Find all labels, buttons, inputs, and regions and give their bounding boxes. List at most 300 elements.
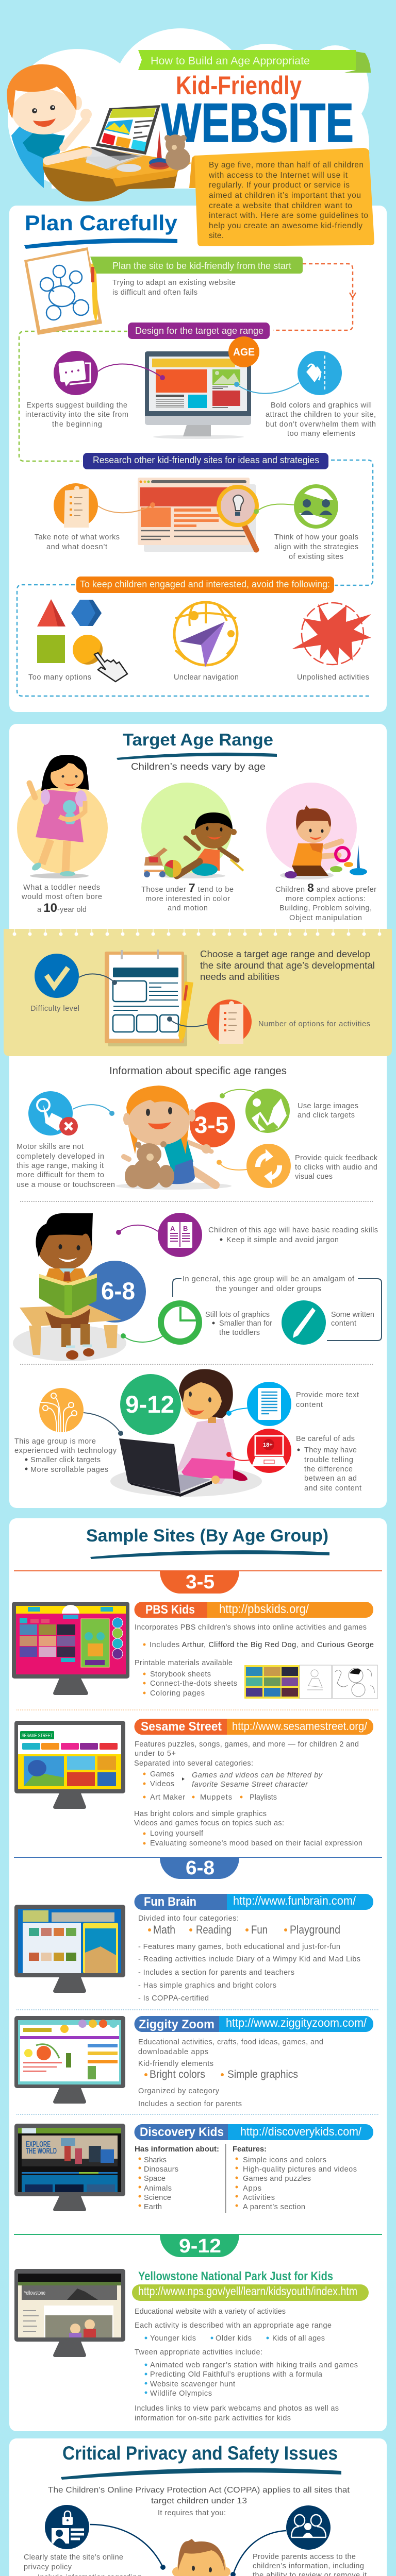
step 1: plan from the start: Plan the site to be kid-friendly from the start	[112, 261, 291, 271]
step 1: plan from the start	[90, 257, 303, 297]
printable materials thumbnails	[244, 1665, 377, 1699]
text: under 7: Those under 7 tend to be	[141, 881, 234, 894]
text: toddler: would most often bore	[21, 893, 102, 901]
text: lots of graphics: Smaller than for	[219, 1319, 272, 1328]
site text: Sesame Street: Features puzzles, songs, games, and more — for children 2 and	[135, 1740, 359, 1749]
connector curve	[226, 1452, 249, 1461]
title: Kid-Friendly: Kid-Friendly	[176, 71, 302, 100]
illustration: boy reading on bench	[13, 1213, 126, 1361]
subheading: specific age ranges: Information about specific age ranges	[109, 1065, 287, 1077]
site text: Fun Brain: - Has simple graphics and bright colors	[138, 1981, 276, 1990]
text: more text content	[296, 1391, 359, 1409]
text: COPPA intro: target children under 13	[151, 2497, 247, 2505]
icon: parents with child	[286, 2505, 331, 2550]
icon: adult ads: 18+	[263, 1442, 273, 1448]
site text: PBS Kids: Connect-the-dots sheets	[150, 1680, 237, 1688]
text: lots of graphics: Still lots of graphics	[205, 1311, 270, 1319]
site: Yellowstone	[14, 2269, 369, 2422]
icon: circuit	[39, 1388, 84, 1432]
site text: information about: Animals	[144, 2184, 172, 2193]
site text: Sesame Street: Has bright colors and simple graphics	[134, 1810, 267, 1818]
icon: burst	[292, 603, 371, 665]
site: PBS Kids	[12, 1602, 377, 1699]
text: written content: Some written	[331, 1311, 374, 1319]
text: reading skills	[208, 1226, 378, 1244]
site text: Sesame Street: favorite Sesame Street character	[192, 1781, 308, 1789]
text: more experienced: This age group is more	[14, 1437, 96, 1446]
site text: Yellowstone: Wildlife Olympics	[150, 2389, 212, 2398]
text: experts suggest: Experts suggest building the	[26, 401, 127, 410]
subheading: Children’s needs vary by age	[131, 761, 266, 772]
age tab: 3-5: 3-5	[186, 1571, 214, 1593]
connector curves	[98, 502, 294, 514]
site text: features: A parent’s section	[243, 2203, 305, 2211]
step 3: research other sites	[35, 453, 358, 561]
site text: PBS Kids: Includes Arthur, Clifford the Big Red Dog, and Curious George	[150, 1641, 374, 1649]
site header: PBS Kids: http://pbskids.org/	[219, 1602, 309, 1616]
connector curve	[217, 1160, 247, 1170]
text: 8 and above: Children 8 and above prefer	[275, 881, 376, 894]
text: large images: and click targets	[298, 1111, 355, 1120]
age tab: 6-8	[14, 1857, 382, 1879]
site text: Fun Brain: Playground	[290, 1923, 340, 1936]
site text: Sesame Street: Videos and games focus on topics such as:	[134, 1819, 284, 1827]
illustration: girl with laptop	[110, 1369, 262, 1497]
text: parents access: Provide parents access to the	[253, 2553, 356, 2561]
icon: globe and compass arrow	[174, 602, 237, 667]
site text: Fun Brain: Divided into four categories:	[138, 1914, 239, 1923]
step 1: plan from the start: Trying to adapt an existing website	[112, 279, 236, 287]
site url pill: http://www.nps.gov/yell/learn/kidsyouth/index.htm	[138, 2284, 357, 2298]
site text: Yellowstone: Older kids	[216, 2334, 252, 2343]
site text: Sesame Street: Playlists	[250, 1793, 277, 1802]
text: parents access	[253, 2553, 367, 2576]
monitor illustration	[145, 351, 251, 439]
text: motor skills: use a mouse or touchscreen	[16, 1181, 115, 1189]
intro callout: regularly. If your product or service is	[209, 181, 350, 190]
screenshot title: Yellowstone	[24, 2290, 45, 2296]
age tab: 9-12	[14, 2234, 382, 2257]
text: quick feedback: Provide quick feedback	[295, 1154, 378, 1162]
badge: 3-5	[190, 1102, 235, 1147]
badge: AGE: AGE	[233, 347, 255, 358]
step 4: avoid the following	[28, 577, 371, 682]
site: Fun Brain	[14, 1894, 373, 2003]
text: parents access: children’s information, including	[253, 2562, 364, 2570]
text: quick feedback	[295, 1154, 378, 1181]
site text: Yellowstone: Website scavenger hunt	[150, 2380, 235, 2388]
icon: graphics chart	[161, 1303, 199, 1342]
site header: Sesame Street: http://www.sesamestreet.org/	[232, 1720, 368, 1733]
site text: Yellowstone: Includes links to view park webcams and photos as well as	[135, 2404, 339, 2413]
icon: feedback	[246, 1144, 291, 1188]
text: experts suggest: interactivity into the site from	[25, 411, 128, 419]
text: bold colors: too many elements	[287, 430, 355, 438]
text: motor skills: more difficult for them to	[16, 1171, 104, 1179]
text: toddler: a 10-year old	[37, 901, 87, 915]
illustration: boy at laptop	[7, 64, 192, 201]
step 3: research other sites: Research other kid-friendly sites for ideas and strategies	[93, 455, 319, 465]
site text: Sesame Street: Muppets	[200, 1793, 232, 1802]
text: COPPA intro	[48, 2486, 350, 2517]
site text: information about: Sharks	[144, 2156, 167, 2164]
text: privacy policy	[24, 2553, 141, 2576]
site text: Fun Brain: Math	[153, 1923, 175, 1936]
site text: Ziggity Zoom: Educational activities, crafts, food ideas, games, and	[138, 2038, 323, 2046]
monitor: PBS Kids screenshot	[12, 1602, 129, 1695]
text: careful of ads: the difference	[304, 1465, 353, 1473]
panel: sample sites	[9, 1518, 387, 2431]
heading: plan carefully: Plan Carefully	[25, 211, 178, 235]
icon: large images	[245, 1089, 290, 1133]
monitor: Discovery Kids screenshot	[14, 2124, 125, 2211]
site text: Ziggity Zoom: downloadable apps	[138, 2048, 208, 2056]
site text: Ziggity Zoom	[138, 2038, 323, 2108]
text: reading skills: Keep it simple and avoid jargon	[226, 1236, 339, 1244]
site text: Yellowstone	[135, 2308, 358, 2422]
site text: information about: Space	[144, 2175, 166, 2183]
text: written content: content	[331, 1319, 356, 1328]
illustration: child at desk with COPPA laptop	[147, 2539, 248, 2576]
site header: Discovery Kids: http://discoverykids.com/	[240, 2125, 362, 2138]
site text: Sesame Street: Separated into several categories:	[134, 1759, 253, 1768]
badge: 9-12: 9-12	[125, 1391, 174, 1418]
text: lots of graphics: the toddlers	[219, 1329, 260, 1337]
text: more experienced: More scrollable pages	[30, 1466, 108, 1474]
site header: Sesame Street: Sesame Street	[141, 1720, 222, 1734]
text: more experienced	[14, 1437, 117, 1474]
text: reading skills: Children of this age will have basic reading skills	[208, 1226, 378, 1234]
text: experts suggest	[25, 401, 128, 429]
site: Discovery Kids	[14, 2124, 373, 2213]
heading underline	[90, 1550, 329, 1559]
site text: Ziggity Zoom: Organized by category	[138, 2087, 220, 2095]
site text: Yellowstone: Predicting Old Faithful’s eruptions with a formula	[150, 2370, 323, 2379]
screenshot logo: SESAME STREET	[22, 1733, 53, 1739]
site text: Sesame Street: Art Maker	[150, 1793, 185, 1802]
heading: critical privacy: Critical Privacy and Safety Issues	[62, 2443, 338, 2464]
monitor: Sesame Street screenshot	[14, 1721, 125, 1809]
icon: book: A	[170, 1225, 175, 1232]
site text: features	[233, 2145, 357, 2211]
illustration: boy with ring stack	[266, 783, 367, 879]
site text: PBS Kids	[135, 1623, 374, 1698]
connector curve	[121, 1333, 163, 1342]
site text: features: Apps	[243, 2184, 261, 2193]
text: lots of graphics	[205, 1311, 272, 1337]
text: take note	[35, 533, 120, 551]
text: think of goals: align with the strategies	[274, 543, 358, 551]
text: think of goals: Think of how your goals	[274, 533, 358, 541]
icon: book	[158, 1213, 202, 1257]
heading underline	[61, 2468, 341, 2480]
site text: Sesame Street: Games and videos can be filtered by	[192, 1771, 323, 1780]
text: choose a target age range: the site around that age’s developmental	[200, 960, 375, 971]
text: motor skills: Motor skills are not	[16, 1143, 84, 1151]
site text: Yellowstone: Animated web ranger’s station with hiking trails and games	[150, 2361, 358, 2369]
panel: privacy and safety	[9, 2438, 387, 2576]
site text: PBS Kids: Printable materials available	[135, 1659, 233, 1667]
label: number of options: Number of options for activities	[258, 1020, 370, 1028]
connector curve	[116, 1225, 158, 1235]
label: difficulty level: Difficulty level	[30, 1005, 79, 1013]
step 2: design for target age	[25, 323, 376, 439]
connector curves	[79, 974, 213, 1027]
illustration: toddler girl	[17, 755, 108, 878]
heading: sample sites: Sample Sites (By Age Group)	[86, 1526, 328, 1546]
icon: adult ads	[247, 1429, 291, 1473]
label: too many options: Too many options	[28, 673, 91, 682]
site text: Ziggity Zoom: Bright colors	[150, 2069, 205, 2080]
site header: Fun Brain: Fun Brain	[144, 1895, 196, 1909]
text: under 7	[141, 881, 234, 912]
site header: Fun Brain: http://www.funbrain.com/	[233, 1894, 356, 1907]
site header: Ziggity Zoom	[134, 2016, 373, 2032]
connector curve	[226, 1408, 248, 1416]
intro callout: create a website that children want to	[209, 201, 352, 210]
illustration: browser and magnifier	[138, 478, 257, 552]
site text: Fun Brain	[138, 1914, 360, 2003]
site text: information about: Science	[144, 2194, 171, 2202]
text: think of goals	[274, 533, 358, 561]
text: bold colors: Bold colors and graphics will	[271, 401, 372, 410]
site text: Ziggity Zoom: Includes a section for parents	[138, 2100, 242, 2108]
text: COPPA intro: The Children’s Online Privacy Protection Act (COPPA) applies to all sites that	[48, 2486, 350, 2495]
text: large images: Use large images	[298, 1102, 358, 1110]
site text: Sesame Street: Evaluating someone’s mood based on their facial expression	[150, 1839, 362, 1848]
text: toddler: What a toddler needs	[23, 884, 100, 892]
screenshot headline: THE WORLD	[26, 2147, 57, 2156]
note band: choose a target age	[4, 929, 392, 1056]
monitor: Yellowstone screenshot	[14, 2269, 125, 2357]
badge: 3-5: 3-5	[194, 1112, 228, 1138]
site text: Yellowstone: Educational website with a variety of activities	[135, 2308, 286, 2316]
text: quick feedback: to clicks with audio and	[295, 1163, 377, 1172]
site header: Sesame Street	[134, 1719, 373, 1735]
step 4: avoid the following: To keep children engaged and interested, avoid the following:	[80, 579, 330, 589]
site text: PBS Kids: Coloring pages	[150, 1689, 205, 1698]
site text: features: Games and puzzles	[243, 2175, 311, 2183]
age group: 9-12	[14, 1369, 361, 1497]
site text: Yellowstone: Kids of all ages	[272, 2334, 325, 2343]
heading underline	[24, 238, 177, 249]
illustration: boy with toys	[141, 783, 243, 878]
illustration: toddler with bear	[116, 1086, 232, 1190]
illustration: clipboard wireframe	[105, 950, 193, 1046]
heading: target age range: Target Age Range	[123, 730, 273, 749]
text: experts suggest: the beginning	[52, 420, 102, 429]
site text: Yellowstone: Younger kids	[150, 2334, 196, 2343]
text: careful of ads: between an ad	[304, 1475, 357, 1483]
connector curve	[220, 1090, 255, 1098]
screenshot logo	[20, 1731, 54, 1739]
text: under 7: more interested in color	[145, 895, 230, 903]
site header: Discovery Kids: Discovery Kids	[140, 2125, 224, 2139]
badge: 6-8	[84, 1261, 146, 1323]
site text: features: High-quality pictures and videos	[243, 2165, 357, 2174]
text: choose a target age range: Choose a target age range and develop	[200, 949, 370, 959]
intro callout: site.	[209, 231, 224, 240]
icon: clipboard with mind map	[24, 247, 102, 335]
title ribbon	[138, 50, 371, 73]
age group: 3-5	[16, 1086, 378, 1190]
dashed path connectors	[17, 264, 373, 696]
site text: PBS Kids: Incorporates PBS children’s shows into online activities and games	[135, 1623, 367, 1632]
text: careful of ads	[296, 1435, 361, 1493]
site text: Yellowstone: information for on-site park activities for kids	[135, 2414, 291, 2422]
text: quick feedback: visual cues	[295, 1173, 333, 1181]
text: take note: and what doesn’t	[46, 543, 107, 551]
heading underline	[117, 753, 277, 760]
age tab: 6-8: 6-8	[186, 1857, 214, 1879]
text: privacy policy: privacy policy	[24, 2563, 72, 2571]
site header: Ziggity Zoom: Ziggity Zoom	[139, 2018, 214, 2031]
intro callout	[189, 148, 374, 246]
icon: touch not allowed	[28, 1091, 78, 1136]
connector curve	[84, 1413, 123, 1436]
text: motor skills: this age range, making it	[16, 1162, 104, 1170]
text: under 7: and motion	[168, 904, 208, 912]
intro callout: help you create an awesome kid-friendly	[209, 222, 362, 230]
site text: Yellowstone: Tween appropriate activities include:	[135, 2348, 262, 2357]
bracket: amalgam: In general, this age group will be an amalgam of	[183, 1275, 355, 1283]
connector curve	[230, 2531, 286, 2576]
monitor: Ziggity Zoom screenshot	[14, 2016, 125, 2104]
text: bold colors	[266, 401, 376, 438]
icon: book: B	[183, 1225, 188, 1232]
label: unclear navigation: Unclear navigation	[174, 673, 239, 682]
site text: features: Activities	[243, 2194, 275, 2202]
text: take note: Take note of what works	[35, 533, 120, 541]
text: bold colors: but don’t overwhelm them with	[266, 420, 376, 429]
site text: Sesame Street: Games	[150, 1770, 174, 1778]
badge: 6-8: 6-8	[101, 1277, 135, 1304]
icon: people and arrows	[294, 484, 338, 529]
site text: Sesame Street: under to 5+	[135, 1750, 176, 1758]
text: 8 and above	[275, 881, 376, 922]
site header: PBS Kids: PBS Kids	[145, 1603, 195, 1617]
text: careful of ads: Be careful of ads	[296, 1435, 355, 1443]
icon: paint bucket	[298, 351, 342, 395]
cloud background	[8, 28, 369, 196]
bracket: amalgam	[173, 1275, 382, 1341]
icon: checkmark	[35, 954, 79, 998]
site text: Fun Brain: Reading	[196, 1923, 232, 1936]
site text: Sesame Street	[134, 1740, 362, 1848]
icon: checklist	[54, 483, 98, 528]
text: bold colors: attract the children to your site,	[266, 411, 376, 419]
text: think of goals: of existing sites	[289, 553, 343, 561]
text: more text content: Provide more text	[296, 1391, 359, 1399]
site header: Discovery Kids	[134, 2124, 373, 2140]
site text: features: Simple icons and colors	[243, 2156, 326, 2164]
site title: Yellowstone: Yellowstone National Park Just for Kids	[138, 2269, 333, 2283]
icon: privacy policy	[45, 2505, 89, 2549]
site text: Fun Brain: - Is COPPA-certified	[138, 1994, 209, 2003]
badge: 9-12	[120, 1374, 181, 1435]
site text: Fun Brain: - Features many games, both educational and just-for-fun	[138, 1943, 340, 1951]
site text: features: Features:	[233, 2145, 267, 2154]
connector curve	[90, 2524, 166, 2570]
site text: Yellowstone: Each activity is described with an appropriate age range	[135, 2321, 332, 2330]
screenshot headline	[26, 2140, 57, 2156]
intro callout: aimed at children it’s important that you	[209, 191, 361, 200]
intro callout: By age five, more than half of all children	[209, 161, 364, 170]
text: more experienced: Smaller click targets	[30, 1456, 101, 1464]
text: more text content: content	[296, 1401, 323, 1409]
bracket: amalgam: the younger and older groups	[216, 1285, 321, 1293]
icon: too many shapes	[37, 599, 127, 682]
text: motor skills: completely developed in	[16, 1153, 104, 1161]
age tab: 3-5	[14, 1570, 382, 1594]
text: toddler	[21, 884, 102, 915]
text: 8 and above: more complex actions:	[286, 895, 366, 903]
text: choose a target age range: needs and abilities	[200, 972, 279, 982]
text: careful of ads: They may have	[304, 1446, 357, 1454]
site text: Fun Brain: - Reading activities include Diary of a Wimpy Kid and Mad Libs	[138, 1955, 360, 1963]
label: unpolished activities: Unpolished activities	[297, 673, 369, 682]
connector curve	[73, 1105, 114, 1116]
site text: information about: Earth	[144, 2203, 162, 2211]
site text: Sesame Street: Videos	[150, 1780, 174, 1788]
site text: information about	[135, 2145, 219, 2211]
age tab: 9-12: 9-12	[179, 2235, 221, 2257]
text: 8 and above: Building, Problem solving,	[279, 904, 372, 912]
text: motor skills	[16, 1143, 115, 1189]
text: choose a target age range	[200, 949, 375, 982]
icon: pen	[282, 1300, 326, 1345]
intro callout: interact with. Here are some guidelines to	[209, 211, 368, 220]
site text: information about: Dinosaurs	[144, 2165, 178, 2174]
site text: PBS Kids: Storybook sheets	[150, 1670, 211, 1679]
text: COPPA intro: It requires that you:	[158, 2509, 226, 2517]
site text: Sesame Street: Loving yourself	[150, 1829, 204, 1838]
text: careful of ads: and site content	[304, 1484, 361, 1493]
badge: AGE	[228, 336, 259, 367]
age group: 6-8	[13, 1213, 382, 1361]
site text: Ziggity Zoom: Kid-friendly elements	[138, 2060, 213, 2068]
site text: information about: Has information about:	[135, 2145, 219, 2154]
text: large images	[298, 1102, 358, 1120]
hero header	[7, 28, 371, 201]
site text: Ziggity Zoom: Simple graphics	[227, 2069, 298, 2080]
site text: Fun Brain: - Includes a section for parents and teachers	[138, 1969, 294, 1977]
text: more experienced: experienced with technology	[14, 1447, 117, 1455]
intro callout: with access to the Internet will use it	[208, 171, 348, 180]
screenshot headline: EXPLORE	[26, 2140, 51, 2149]
step 1: plan from the start: is difficult and often fails	[112, 289, 197, 297]
site header: PBS Kids	[134, 1602, 373, 1618]
text: privacy policy: Clearly state the site’s online	[24, 2553, 123, 2562]
panel: plan carefully	[9, 206, 387, 712]
site header: Fun Brain	[134, 1894, 373, 1910]
site: Sesame Street	[14, 1719, 373, 1848]
icon: tablet text	[247, 1382, 291, 1426]
text: written content	[331, 1311, 374, 1328]
site: Ziggity Zoom	[14, 2016, 373, 2108]
text: careful of ads: trouble telling	[304, 1456, 353, 1464]
site header: Ziggity Zoom: http://www.ziggityzoom.com/	[226, 2016, 367, 2029]
icon: checklist	[207, 999, 252, 1044]
title ribbon: How to Build an Age Appropriate	[151, 55, 310, 67]
site text: Fun Brain: Fun	[251, 1923, 268, 1936]
panel: target age range	[4, 724, 392, 1508]
icon: speech bubbles	[54, 351, 98, 395]
monitor: Fun Brain screenshot	[14, 1905, 125, 1993]
connector curves	[98, 364, 299, 394]
text: 8 and above: Object manipulation	[289, 914, 362, 922]
step 2: design for target age: Design for the target age range	[135, 326, 263, 336]
